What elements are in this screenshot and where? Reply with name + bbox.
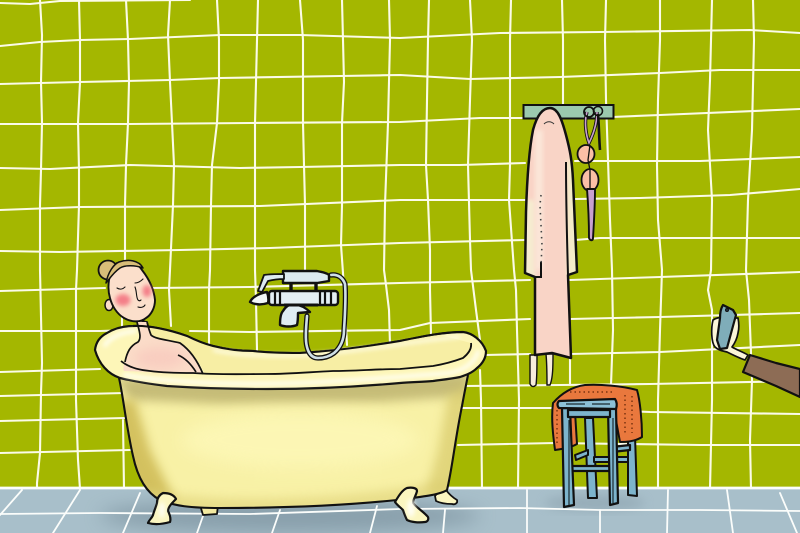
front right leg bbox=[608, 408, 618, 505]
forearm and hand bbox=[712, 318, 748, 360]
hair bbox=[106, 260, 143, 283]
seat shadow lines bbox=[566, 404, 613, 505]
torso outline bbox=[125, 322, 203, 374]
floor: grey-blue tiles bbox=[0, 488, 800, 533]
sleeve bbox=[743, 355, 800, 397]
rim top outline bbox=[133, 326, 463, 353]
tub body bbox=[119, 375, 468, 508]
collar mark bbox=[544, 122, 554, 124]
floor shadow beneath the stool bbox=[545, 495, 645, 511]
hook loops bbox=[584, 107, 594, 117]
straps bbox=[586, 112, 597, 143]
upper cup bbox=[578, 145, 594, 163]
cup join bbox=[588, 145, 590, 190]
robe sleeve tint bbox=[526, 130, 576, 276]
phone in hand bbox=[712, 305, 800, 397]
loose strap bbox=[598, 114, 600, 150]
foot highlights bbox=[159, 499, 415, 518]
ear bbox=[105, 300, 113, 310]
tub rim bbox=[95, 326, 486, 389]
robe stitching bbox=[540, 195, 542, 265]
orange towel bbox=[552, 385, 642, 450]
phone bbox=[717, 305, 736, 349]
phone lens bbox=[726, 308, 728, 312]
rim inner surface bbox=[150, 326, 471, 374]
sleeve seam bbox=[535, 162, 568, 277]
floor grout lines bbox=[0, 488, 800, 533]
risers bbox=[291, 283, 316, 291]
shower arm bbox=[258, 274, 284, 292]
mixer underside shadow bbox=[284, 304, 318, 306]
mixer ridges bbox=[275, 292, 331, 305]
legs under the robe bbox=[530, 354, 553, 387]
bra hanging on rack bbox=[578, 106, 602, 240]
torso overlap inside tub bbox=[123, 322, 202, 374]
face bbox=[108, 262, 155, 321]
bath taps bbox=[250, 271, 338, 326]
woman in the bath bbox=[98, 260, 203, 374]
facial features bbox=[117, 279, 145, 307]
upper shower valve bbox=[283, 271, 329, 283]
mixer body bbox=[269, 291, 338, 305]
left front foot bbox=[148, 493, 176, 524]
tub shading bbox=[120, 376, 467, 507]
floor shadow beneath the tub bbox=[100, 499, 480, 533]
chest tint bbox=[135, 347, 185, 369]
seat bbox=[558, 399, 617, 409]
tub body outline bbox=[119, 375, 468, 508]
hanging band bbox=[587, 189, 595, 240]
bathtub back feet bbox=[200, 490, 457, 515]
bathrobe bbox=[520, 108, 579, 358]
right front foot bbox=[395, 488, 428, 522]
spout bbox=[280, 304, 310, 326]
towel rack bbox=[524, 105, 614, 118]
shower hose bbox=[306, 275, 345, 358]
bathtub front feet bbox=[148, 488, 428, 524]
seat apron bbox=[568, 410, 610, 417]
stool bbox=[558, 399, 630, 507]
inner rim highlight bbox=[213, 337, 460, 356]
shower head bbox=[250, 292, 268, 304]
hair bun bbox=[98, 260, 118, 280]
rungs bbox=[569, 466, 610, 471]
lower cup bbox=[582, 169, 598, 191]
rim inner line bbox=[121, 343, 471, 374]
torso bbox=[122, 320, 203, 374]
stool back legs bbox=[575, 418, 637, 498]
cheeks bbox=[116, 285, 152, 306]
towel texture bbox=[557, 392, 632, 445]
bathtub bbox=[95, 322, 486, 515]
robe outline bbox=[525, 108, 577, 358]
front left leg bbox=[562, 408, 574, 507]
rim highlight bbox=[105, 331, 478, 384]
